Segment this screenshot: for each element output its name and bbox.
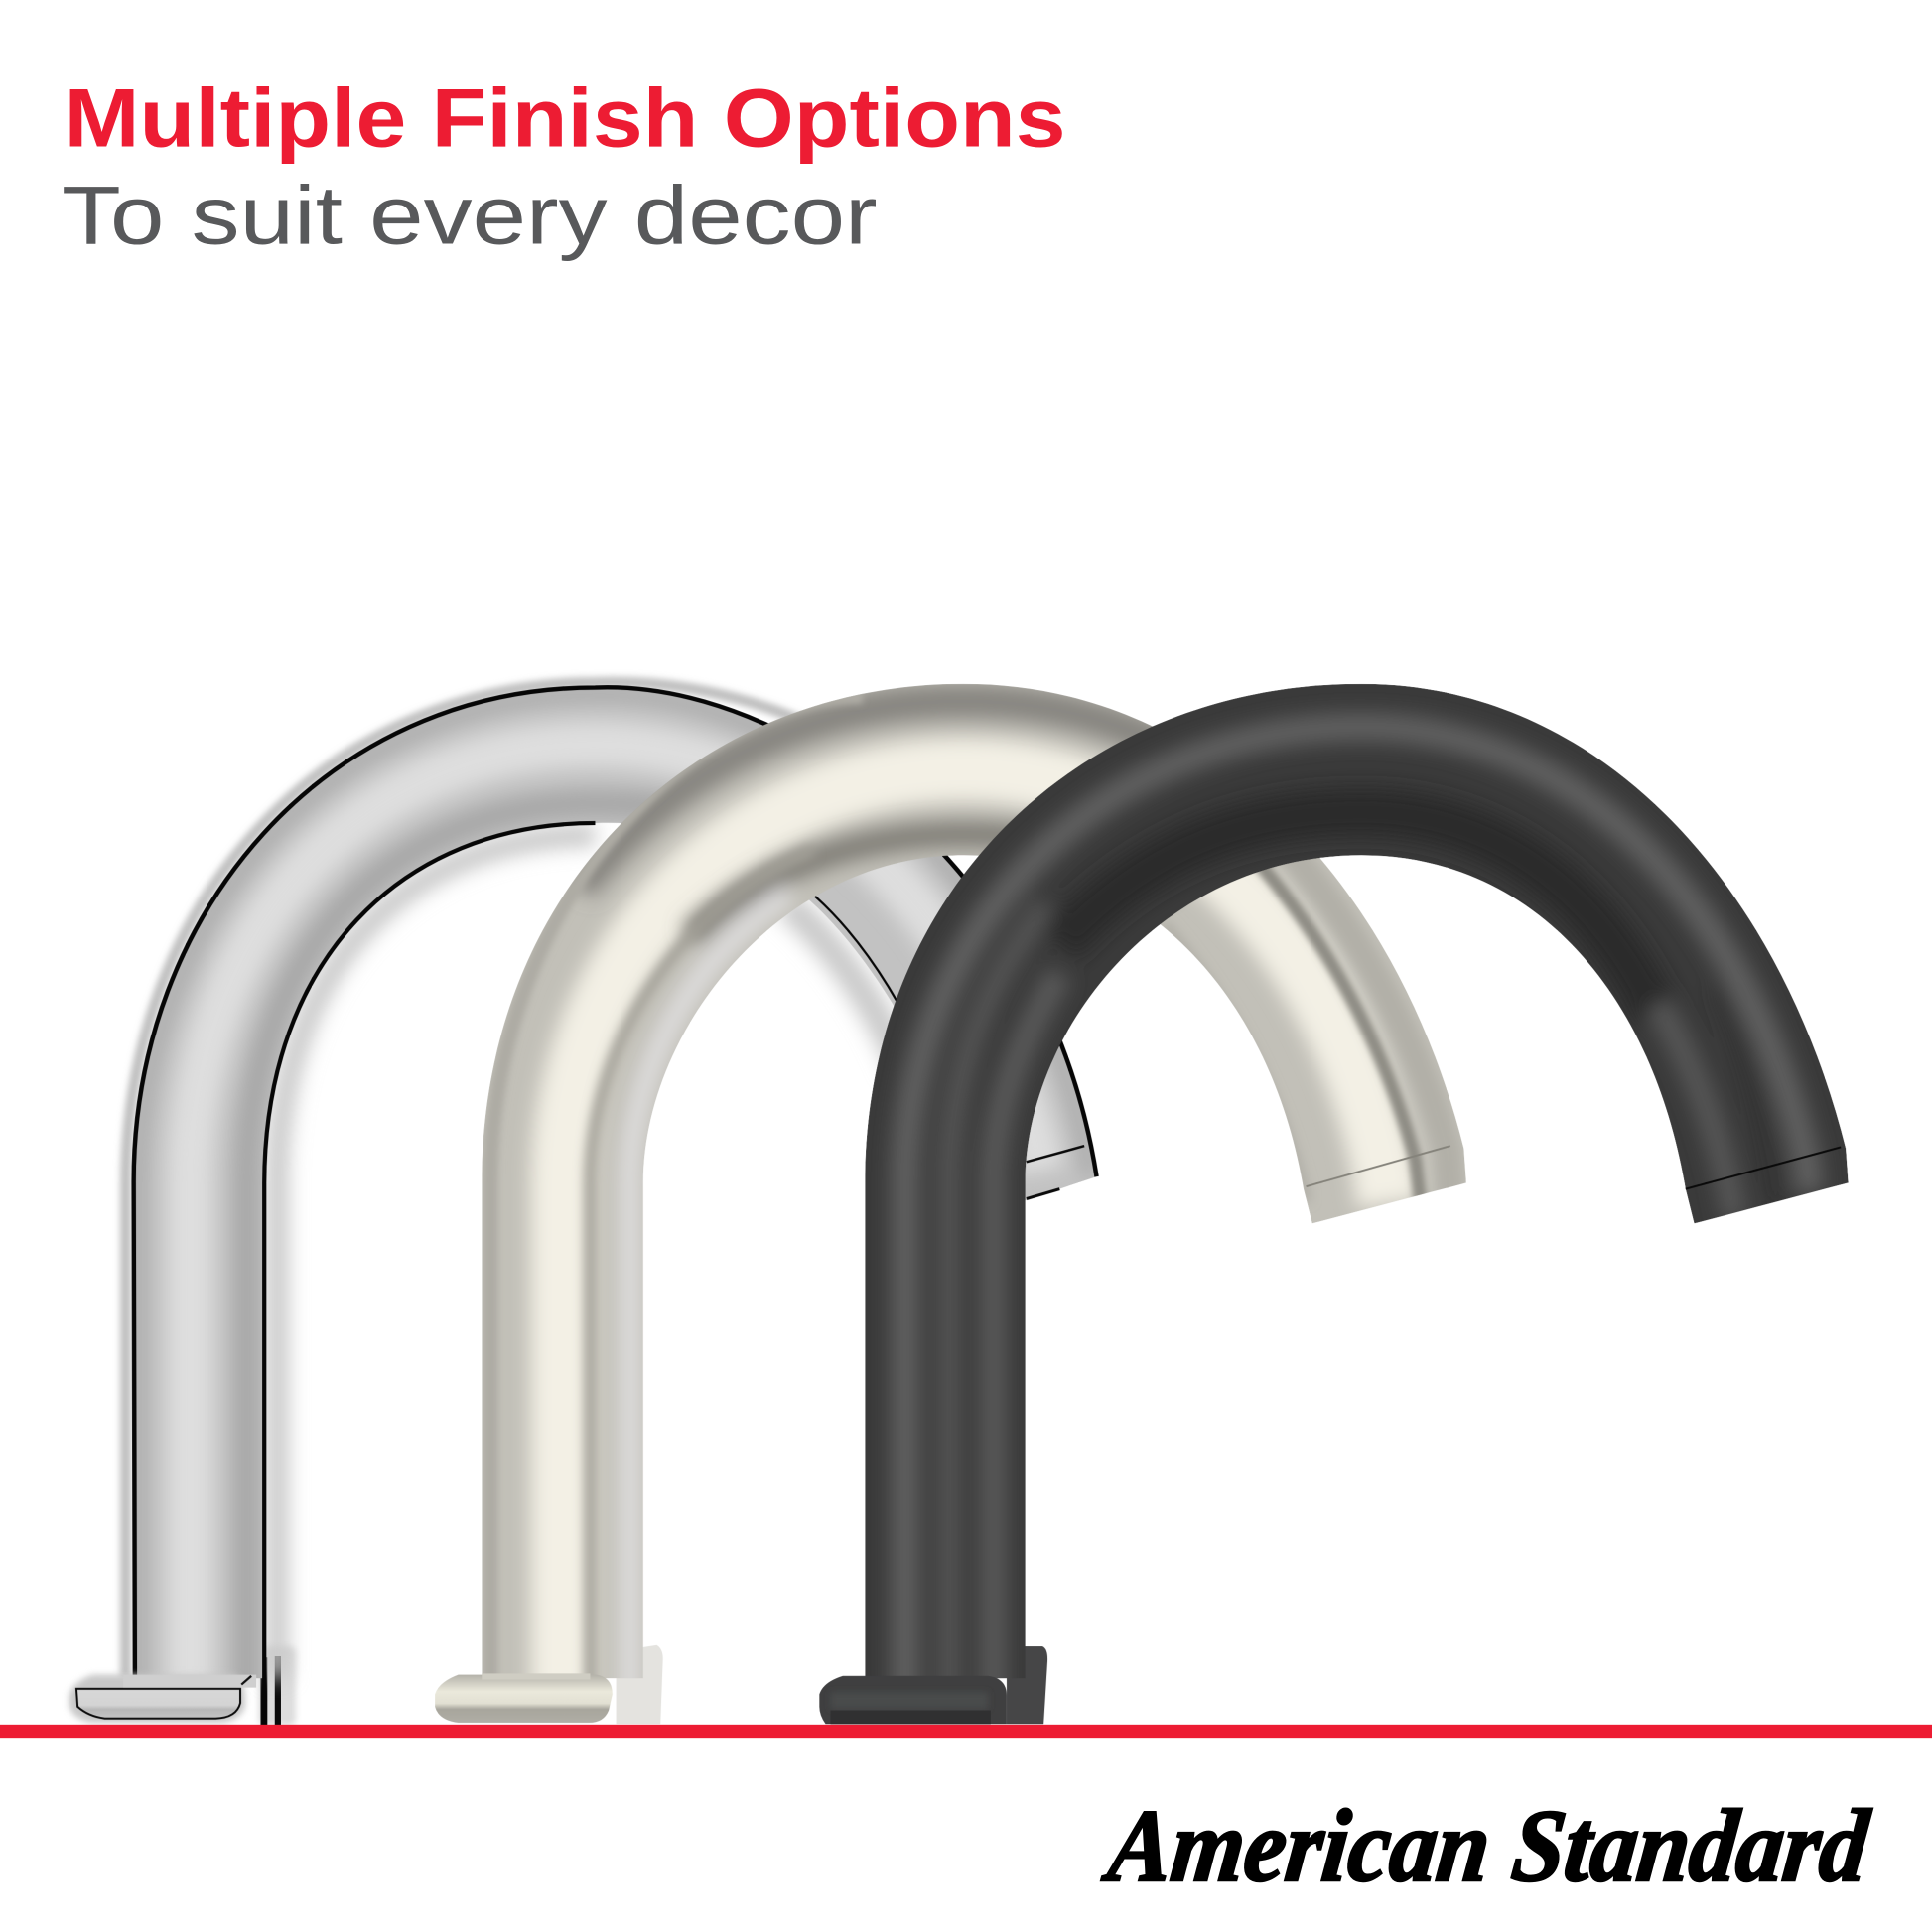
matte black faucet [819, 684, 1849, 1725]
title: Multiple Finish Options: Multiple Finish Options [65, 72, 1066, 165]
nickel spout [482, 684, 1466, 1725]
black outlet ring [1686, 1147, 1841, 1189]
nickel handle [617, 1645, 663, 1724]
chrome handle [259, 1646, 296, 1725]
subtitle: To suit every decor: To suit every decor [62, 170, 878, 262]
nickel outlet ring [1307, 1146, 1450, 1186]
chrome faucet [69, 682, 1097, 1725]
logo: American Standard: American Standard [1098, 1788, 1875, 1903]
nickel base [435, 1673, 613, 1723]
chrome spout [126, 682, 1097, 1725]
black spout [865, 684, 1849, 1725]
brushed nickel faucet [435, 684, 1466, 1725]
red baseline bar [0, 1725, 1932, 1738]
chrome base [69, 1675, 256, 1723]
black handle [1007, 1646, 1047, 1724]
black base [819, 1676, 1007, 1724]
chrome outlet ring [1027, 1146, 1084, 1199]
